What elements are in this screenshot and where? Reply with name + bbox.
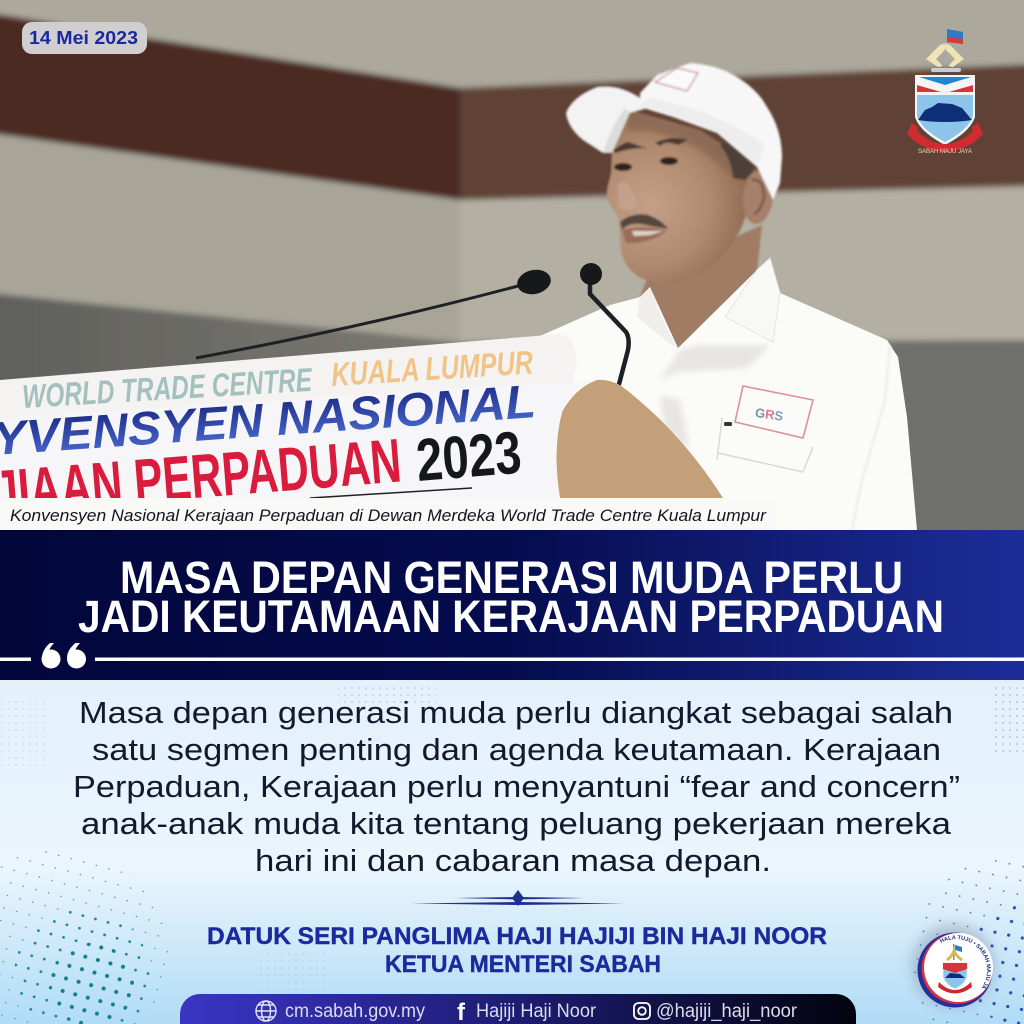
shirt [540,258,917,530]
quote divider [0,643,1024,668]
lower panel background [0,680,1024,1024]
GRS badge [735,386,813,438]
quote text: Perpaduan, Kerajaan perlu menyantuni “fear and concern” [73,769,960,804]
podium lower text: YVENSYEN NASIONAL [0,374,537,465]
ornament divider [412,890,624,906]
quote text: Masa depan generasi muda perlu diangkat sebagai salah [79,695,953,730]
photo background: hall wall [0,0,1024,540]
podium upper text [24,351,532,408]
podium lower text: JIAAN PERPADUAN [0,426,404,528]
date badge [22,22,147,54]
podium with banners [0,336,723,498]
cap [566,63,782,200]
photo caption bar [0,498,776,530]
podium lower text [0,386,534,498]
state crest: Sabah coat of arms [907,25,983,155]
face [607,110,776,284]
podium lower text: 2023 [414,419,524,494]
quote text: anak-anak muda kita tentang peluang pekerjaan mereka [81,806,952,841]
contact bar [180,994,856,1024]
neck [640,225,762,350]
headline: JADI KEUTAMAAN KERAJAAN PERPADUAN [78,591,944,642]
podium lower panel [0,380,597,498]
instagram handle: @hajiji_haji_noor [656,1001,798,1022]
website: cm.sabah.gov.my [285,1001,425,1022]
round logo: Hala Tuju Sabah Maju Jaya: HALA TUJU • SABAH MAJU JAYA [940,935,991,988]
podium upper text: WORLD TRADE CENTRE [21,361,314,415]
headline: MASA DEPAN GENERASI MUDA PERLU [120,552,903,603]
headline band [0,530,1024,680]
headline [78,552,944,642]
icon: globe [256,1001,276,1021]
state crest: Sabah coat of arms: SABAH MAJU JAYA [918,149,972,155]
quote text: hari ini dan cabaran masa depan. [255,843,771,878]
icon: instagram [634,1003,650,1019]
speaker photo: man in white cap and shirt [540,63,917,530]
GRS badge: GRS [754,405,784,424]
facebook name: Hajiji Haji Noor [476,1001,597,1022]
podium upper text: KUALA LUMPUR [330,343,534,393]
photo caption bar: Konvensyen Nasional Kerajaan Perpaduan di Dewan Merdeka World Trade Centre Kuala Lumpur [10,506,767,525]
podium wood side [556,380,723,498]
date badge: 14 Mei 2023 [29,28,138,48]
attribution: DATUK SERI PANGLIMA HAJI HAJIJI BIN HAJI NOOR [207,923,827,950]
quote text [73,695,960,878]
quote text: satu segmen penting dan agenda keutamaan. Kerajaan [92,732,941,767]
attribution: KETUA MENTERI SABAH [385,951,661,978]
attribution [207,923,827,978]
microphones [196,263,629,388]
podium upper panel [0,334,577,425]
shirt pocket [717,418,813,472]
